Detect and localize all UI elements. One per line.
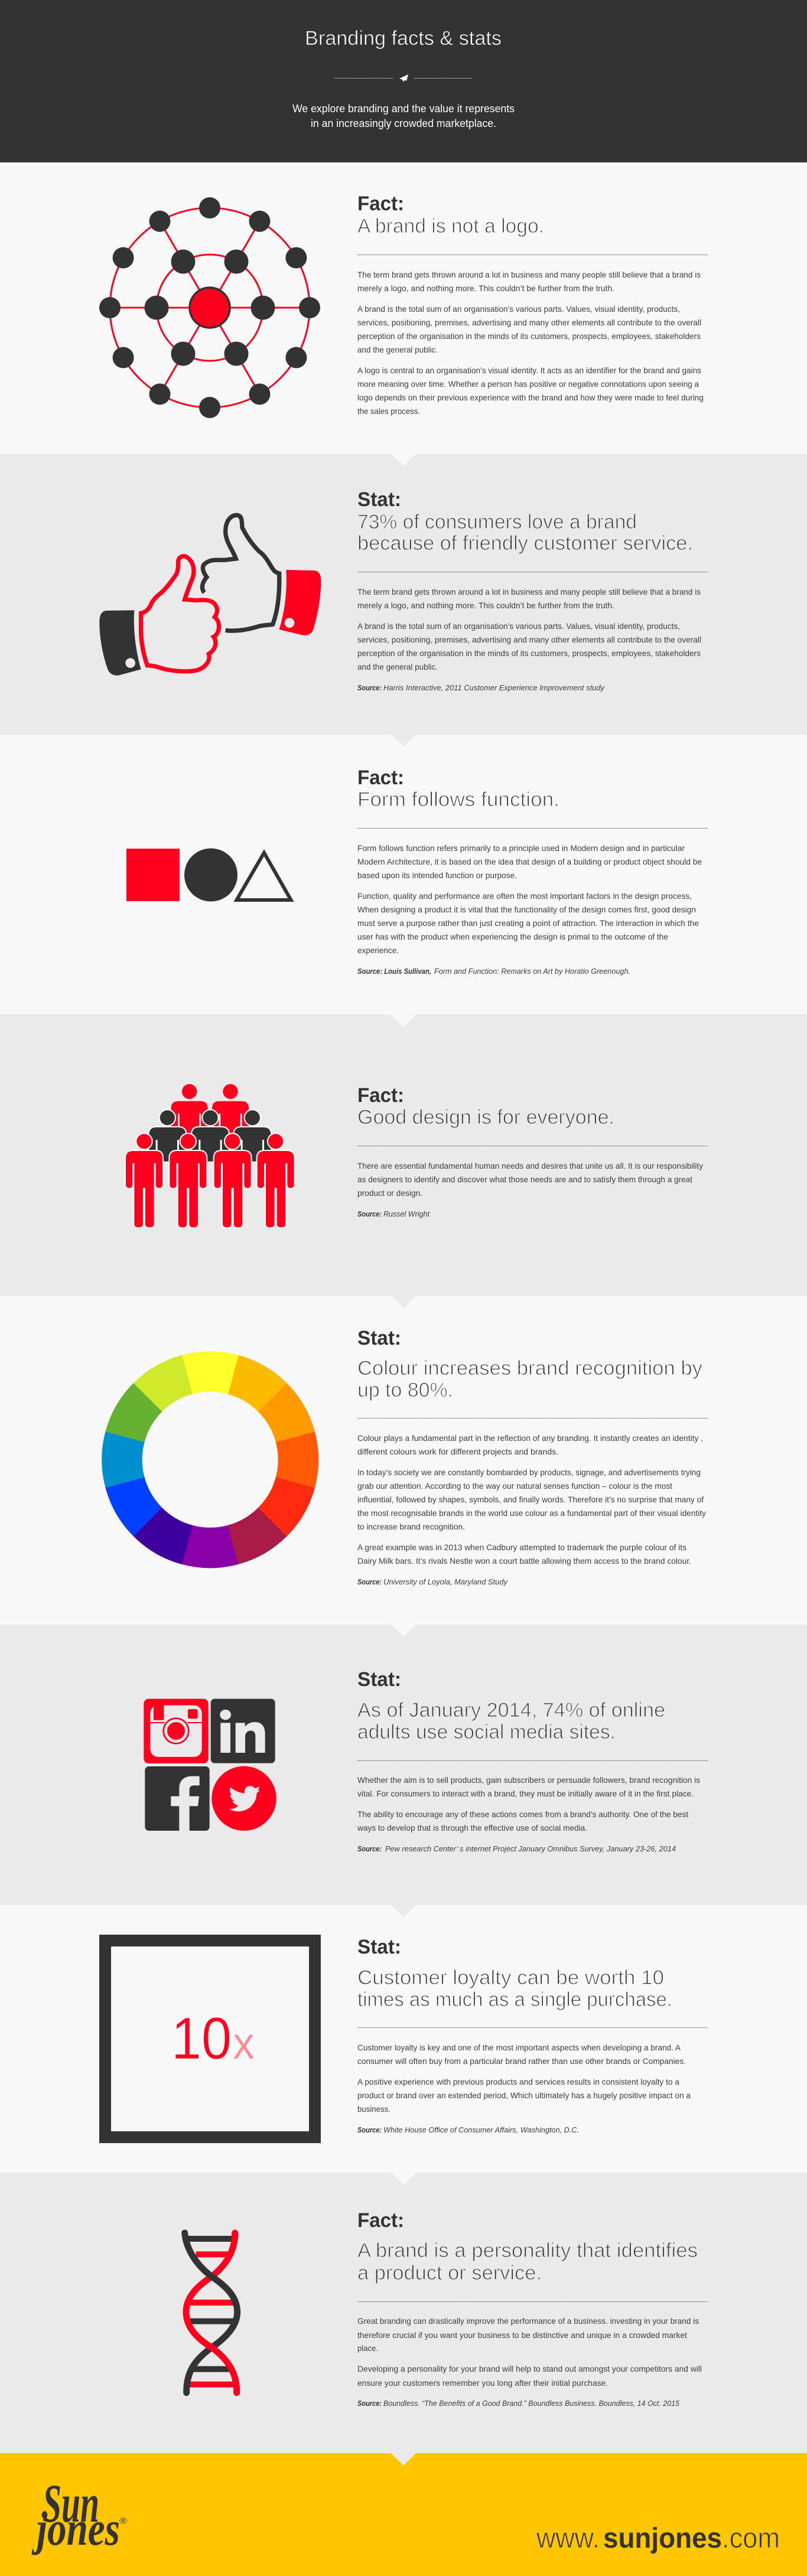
heading: Stat: — [357, 1668, 401, 1691]
panel: fact, a brand is not a logo — [0, 162, 807, 455]
body text: experience. — [357, 945, 399, 955]
arrow: section pointer — [391, 1015, 416, 1027]
body text — [357, 270, 704, 416]
body text: Colour plays a fundamental part in the reflection of any branding. It instantly creates an identity , — [357, 1433, 703, 1443]
source: Form and Function: Remarks on Art by Horatio Greenough. — [434, 967, 630, 976]
body text: and the general public. — [357, 345, 438, 354]
body text: grab our attention. According to the way our natural senses function – colour is the most — [357, 1481, 672, 1491]
icon: 10x framed: x — [233, 2018, 255, 2069]
body text: A great example was in 2013 when Cadbury attempted to trademark the purple colour of its — [357, 1543, 686, 1552]
body text: perception of the organisation in the minds of its customers, prospects, employees, stakeholders — [357, 331, 701, 341]
body text: consumer will often buy from a particular brand rather than use other brands or Companies. — [357, 2056, 686, 2066]
heading: Stat: — [357, 1327, 401, 1349]
panel: fact, form follows function — [0, 735, 807, 1015]
body text: Form follows function refers primarily to a principle used in Modern design and in particular — [357, 843, 685, 853]
body text: as designers to identify and discover what those needs are and to satisfy them through a great — [357, 1175, 692, 1184]
icon: two thumbs up — [99, 515, 321, 676]
website url: www. — [536, 2523, 600, 2554]
body text: services, positioning, premises, advertising and many other elements all contribute to the overall — [357, 318, 701, 327]
heading: Fact: — [357, 193, 404, 215]
body text: services, positioning, premises, advertising and many other elements all contribute to the overall — [357, 635, 701, 644]
body text — [357, 2043, 691, 2114]
heading: because of friendly customer service. — [357, 532, 693, 555]
heading: A brand is not a logo. — [357, 215, 544, 237]
body text: user has with the product when experiencing the design is primal to the outcome of the — [357, 932, 668, 941]
arrow: section pointer — [391, 2453, 416, 2466]
subtitle — [292, 103, 515, 129]
icon: 10x framed — [105, 1941, 315, 2137]
icon: linkedin — [211, 1699, 275, 1763]
heading: up to 80%. — [357, 1379, 453, 1401]
body text: A brand is the total sum of an organisation’s various parts. Values, visual identity, products, — [357, 304, 680, 314]
source: Source: — [357, 2125, 382, 2134]
heading — [357, 193, 544, 237]
panel: stat, customer loyalty — [0, 1905, 807, 2173]
heading — [357, 1084, 614, 1129]
source: Source: — [357, 2399, 382, 2408]
body text: There are essential fundamental human needs and desires that unite us all. It is our responsibility — [357, 1161, 703, 1170]
title: Branding facts & stats — [305, 27, 502, 50]
body text: ensure your customers remember you long after their initial purchase. — [357, 2378, 608, 2388]
heading: times as much as a single purchase. — [357, 1988, 672, 2011]
body text: product or design. — [357, 1188, 422, 1198]
source: Source: — [357, 1844, 382, 1853]
body text: When designing a product it is vital that the functionality of the design comes first, good design — [357, 905, 696, 914]
source: Russel Wright — [383, 1209, 430, 1218]
body text — [357, 587, 701, 671]
body text: merely a logo, and nothing more. This couldn’t be further from the truth. — [357, 283, 614, 293]
chart: colour wheel — [86, 1335, 335, 1584]
body text: merely a logo, and nothing more. This couldn’t be further from the truth. — [357, 601, 614, 610]
arrow: section pointer — [391, 2173, 416, 2184]
panel: stat, 73% of consumers — [0, 454, 807, 735]
body text: Modern Architecture, it is based on the idea that design of a building or product object should be — [357, 857, 702, 866]
body text: The term brand gets thrown around a lot in business and many people still believe that a brand is — [357, 270, 701, 279]
subtitle: We explore branding and the value it represents — [292, 103, 515, 115]
body text: different colours work for different projects and brands. — [357, 1447, 558, 1456]
source: Pew research Center’ s internet Project January Omnibus Survey, January 23-26, 2014 — [385, 1844, 676, 1853]
heading: Stat: — [357, 488, 401, 511]
heading — [357, 1668, 665, 1743]
icon: paper plane — [399, 74, 408, 81]
panel: footer — [0, 2453, 807, 2576]
heading — [357, 1936, 672, 2011]
logo: Sun Jones: Sun — [43, 2473, 99, 2533]
heading: adults use social media sites. — [357, 1721, 616, 1743]
body text — [357, 1161, 703, 1198]
icon: square, circle and triangle — [126, 848, 291, 901]
body text: vital. For consumers to interact with a brand, they must be initially aware of it in the first place. — [357, 1789, 694, 1798]
source: Harris Interactive, 2011 Customer Experience Improvement study — [383, 683, 605, 692]
body text — [357, 1433, 706, 1566]
panel: fact, good design is for everyone — [0, 1015, 807, 1296]
heading: Customer loyalty can be worth 10 — [357, 1967, 664, 1989]
body text: The term brand gets thrown around a lot in business and many people still believe that a brand is — [357, 587, 701, 596]
panel: header — [0, 0, 807, 162]
heading — [357, 488, 693, 555]
body text: more meaning over time. Whether a person has positive or negative connotations upon seeing a — [357, 379, 699, 389]
panel: fact, brand personality — [0, 2173, 807, 2453]
arrow: section pointer — [391, 1625, 416, 1636]
body text: influential, followed by shapes, symbols, and finally words. Therefore it’s no surprise that many of — [357, 1495, 704, 1504]
body text: In today’s society we are constantly bombarded by products, signage, and advertisements trying — [357, 1468, 701, 1477]
body text — [357, 2316, 702, 2388]
logo: Sun Jones: jones — [31, 2502, 120, 2555]
heading: Good design is for everyone. — [357, 1106, 614, 1129]
website url — [536, 2523, 780, 2554]
body text — [357, 843, 702, 955]
panel: stat, colour increases brand recognition — [0, 1296, 807, 1625]
source — [357, 1209, 430, 1218]
body text — [357, 1775, 700, 1832]
arrow: section pointer — [391, 1296, 416, 1308]
body text: logo depends on their previous experience with the brand and how they were made to feel during — [357, 393, 704, 402]
source: Source: — [357, 1577, 382, 1586]
icon: network of nodes — [99, 197, 320, 418]
body text: Dairy Milk bars. It’s rivals Nestle won a court battle allowing them access to the brand colour. — [357, 1556, 691, 1566]
heading: 73% of consumers love a brand — [357, 511, 637, 533]
heading: Colour increases brand recognition by — [357, 1357, 702, 1380]
heading: Stat: — [357, 1936, 401, 1958]
body text: product or brand over an extended period, Which ultimately has a hugely positive impact on a — [357, 2091, 691, 2100]
icon: facebook — [145, 1766, 210, 1831]
icon: instagram — [144, 1699, 209, 1763]
body text: Function, quality and performance are often the most important factors in the design process, — [357, 891, 692, 901]
body text: Great branding can drastically improve the performance of a business. investing in your brand is — [357, 2316, 699, 2326]
body text: and the general public. — [357, 662, 438, 671]
icon: twitter — [211, 1766, 276, 1831]
icon: 10x framed: 10 — [171, 2006, 232, 2072]
body text: Customer loyalty is key and one of the most important aspects when developing a brand. A — [357, 2043, 681, 2052]
icon: group of people — [126, 1084, 294, 1227]
heading — [357, 2209, 698, 2284]
panel: stat, social media use — [0, 1625, 807, 1905]
heading — [357, 767, 559, 811]
heading: Fact: — [357, 1084, 404, 1107]
icon: social media logos — [144, 1699, 276, 1831]
body text: the sales process. — [357, 406, 420, 416]
body text: perception of the organisation in the minds of its customers, prospects, employees, stakeholders — [357, 648, 701, 658]
body text: Whether the aim is to sell products, gain subscribers or persuade followers, brand recognition is — [357, 1775, 700, 1785]
heading: As of January 2014, 74% of online — [357, 1699, 665, 1721]
arrow: section pointer — [391, 735, 416, 746]
body text: A positive experience with previous products and services results in consistent loyalty to a — [357, 2077, 679, 2086]
website url: .com — [722, 2523, 780, 2554]
heading: Fact: — [357, 767, 404, 789]
body text: A logo is central to an organisation’s visual identity. It acts as an identifier for the brand and gains — [357, 366, 701, 375]
heading: a product or service. — [357, 2262, 542, 2284]
icon: DNA helix — [185, 2233, 237, 2393]
source: Source: Louis Sullivan, — [357, 967, 431, 976]
body text: the most recognisable brands in the world use colour as a fundamental part of their visual identity — [357, 1508, 706, 1518]
subtitle: in an increasingly crowded marketplace. — [311, 118, 496, 129]
source: White House Office of Consumer Affairs, Washington, D.C. — [383, 2125, 579, 2134]
source: University of Loyola, Maryland Study — [383, 1577, 508, 1586]
source: Source: — [357, 1209, 382, 1218]
logo: Sun Jones — [31, 2473, 128, 2555]
heading: A brand is a personality that identifies — [357, 2239, 698, 2262]
body text: The ability to encourage any of these actions comes from a brand’s authority. One of the best — [357, 1809, 688, 1819]
arrow: section pointer — [391, 1905, 416, 1917]
body text: therefore crucial if you want your business to be distinctive and unique in a crowded market — [357, 2330, 687, 2340]
heading: Form follows function. — [357, 788, 559, 811]
body text: business. — [357, 2104, 391, 2114]
body text: must serve a purpose rather than just creating a point of attraction. The interaction in which the — [357, 918, 699, 928]
heading: Fact: — [357, 2209, 404, 2232]
body text: Developing a personality for your brand will help to stand out amongst your competitors and will — [357, 2364, 702, 2373]
source: Boundless. “The Benefits of a Good Brand.” Boundless Business. Boundless, 14 Oct. 2015 — [383, 2399, 680, 2408]
body text: to increase brand recognition. — [357, 1522, 465, 1531]
logo: Sun Jones: ® — [119, 2516, 128, 2525]
body text: ways to develop that is through the effective use of social media. — [357, 1823, 587, 1832]
website url: sunjones — [603, 2523, 722, 2554]
heading — [357, 1327, 702, 1401]
body text: based upon its intended function or purpose. — [357, 870, 517, 880]
body text: place. — [357, 2343, 378, 2353]
source: Source: — [357, 683, 382, 692]
arrow: section pointer — [391, 454, 416, 466]
body text: A brand is the total sum of an organisation’s various parts. Values, visual identity, products, — [357, 621, 680, 631]
